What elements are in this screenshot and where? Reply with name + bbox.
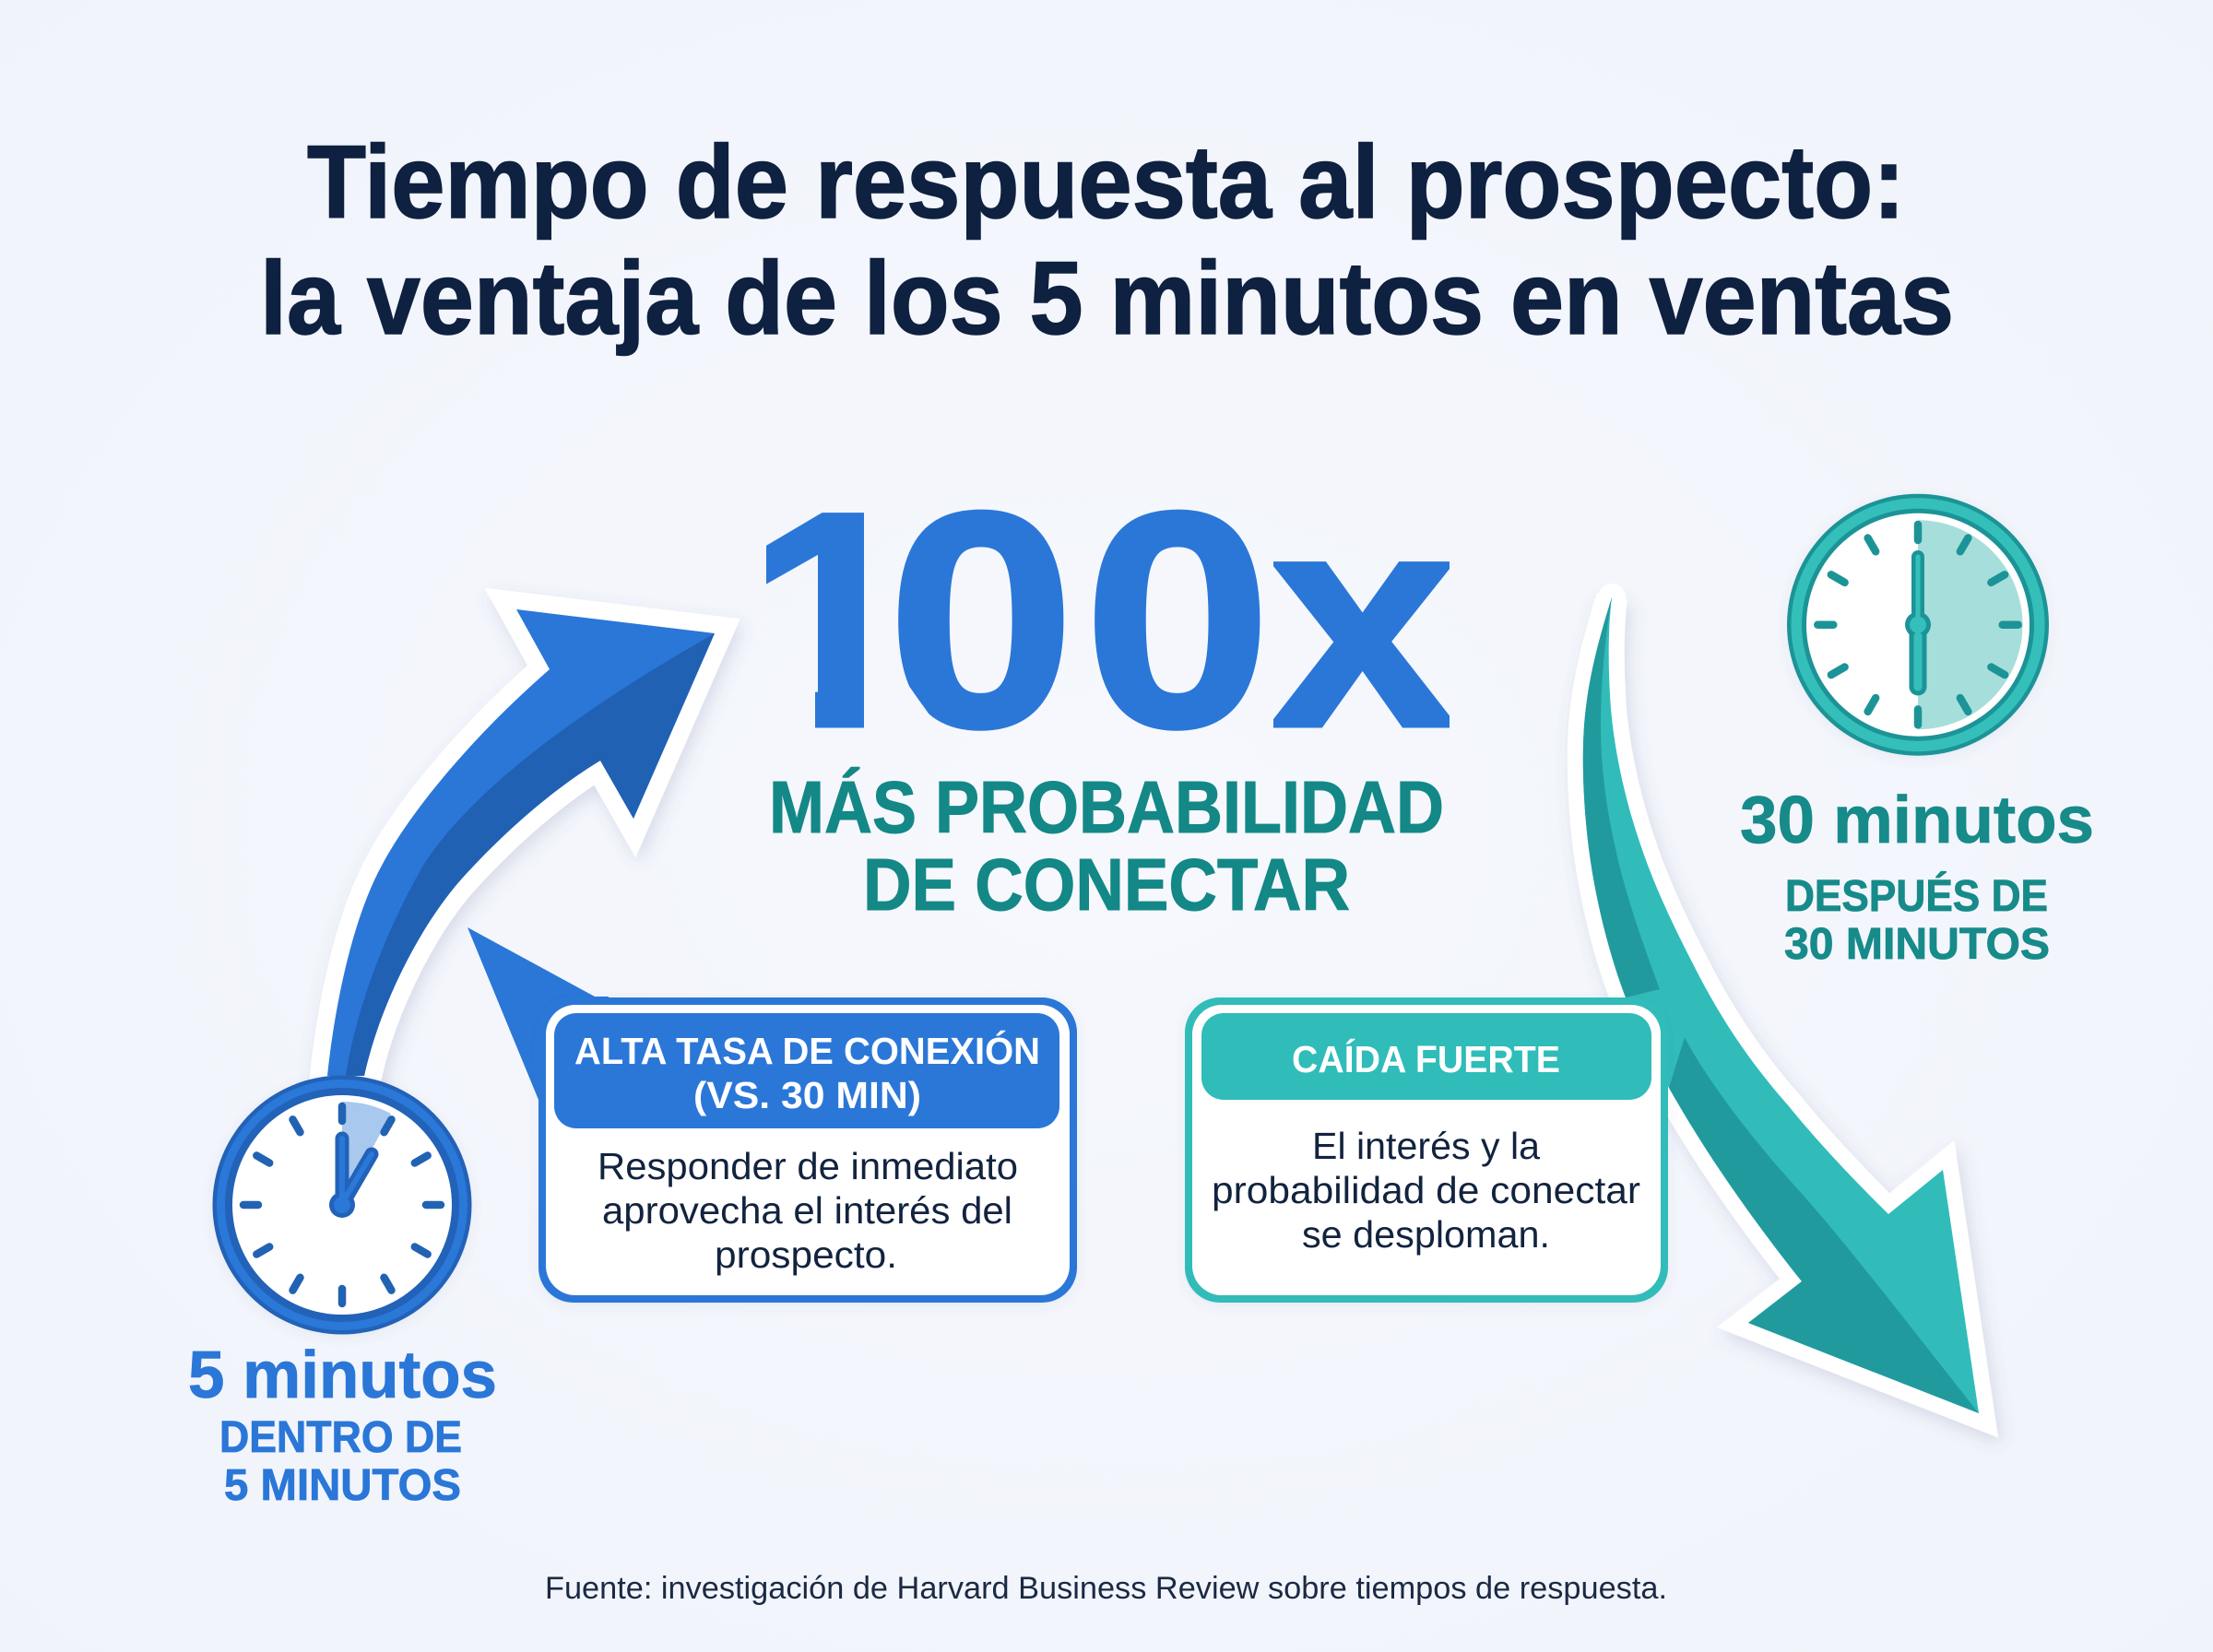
label: 30 minutes [1740,784,2094,969]
clock hands [329,1139,372,1218]
title [260,124,1954,356]
callout: high connection rate: aprovecha el interés del [602,1189,1012,1232]
subheading: MÁS PROBABILIDAD [769,766,1444,848]
callout: high connection rate [467,927,1077,1303]
callout pointer [467,927,609,1106]
callout: sharp drop: CAÍDA FUERTE [1292,1038,1560,1080]
arrow: falling teal [1583,584,1979,1413]
clock hands [1905,557,1931,687]
callout: high connection rate: prospecto. [715,1233,897,1276]
source note: Fuente: investigación de Harvard Business Review sobre tiempos de respuesta. [545,1571,1667,1606]
title: Tiempo de respuesta al prospecto: [307,124,1905,240]
label: 30 minutes: 30 MINUTOS [1784,920,2050,969]
callout: sharp drop: El interés y la [1312,1125,1540,1167]
big number: 100x [742,448,1459,790]
subheading [769,766,1444,926]
callout: high connection rate: ALTA TASA DE CONEXIÓN [574,1030,1040,1072]
clock: 5 minutes [212,1075,472,1335]
label: 30 minutes: DESPUÉS DE [1785,871,2048,921]
callout: high connection rate: Responder de inmediato [598,1145,1018,1187]
callout: sharp drop [1185,997,1668,1303]
clock ticks [243,1106,441,1304]
callout: high connection rate: (VS. 30 MIN) [693,1074,921,1116]
arrow: rising blue [327,609,715,1076]
label: 5 minutes: 5 minutos [188,1339,497,1412]
label: 5 minutes: 5 MINUTOS [224,1461,461,1510]
label: 5 minutes: DENTRO DE [219,1413,462,1462]
label: 5 minutes [188,1339,497,1510]
clock ticks [1817,525,2018,725]
clock: 30 minutes [1787,494,2049,756]
clock sector [1918,520,2023,729]
subheading: DE CONECTAR [863,844,1350,926]
callout: sharp drop: se desploman. [1302,1213,1550,1256]
label: 30 minutes: 30 minutos [1740,784,2094,857]
clock sector [342,1102,391,1205]
callout: sharp drop: probabilidad de conectar [1212,1169,1640,1211]
title: la ventaja de los 5 minutos en ventas [260,241,1954,356]
